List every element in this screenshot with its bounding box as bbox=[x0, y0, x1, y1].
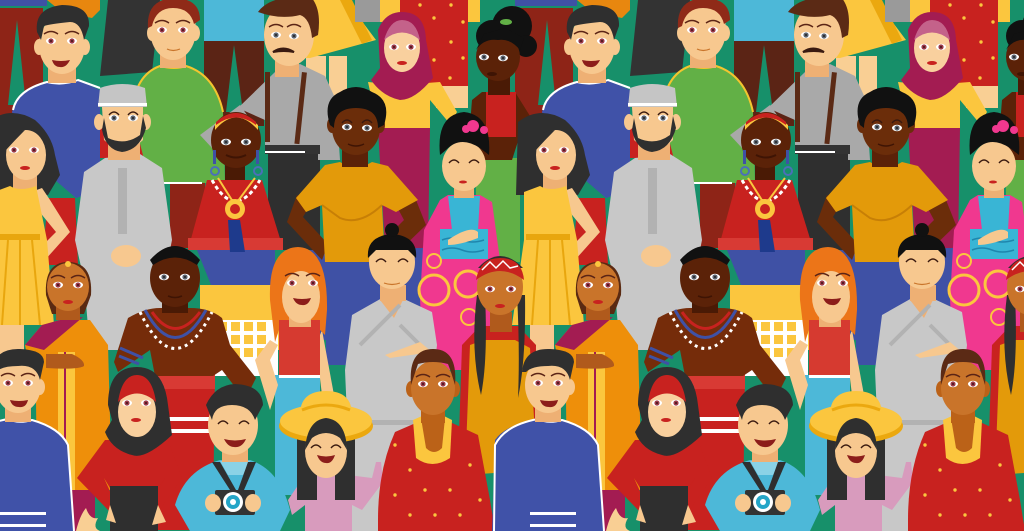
back row repeat right bbox=[542, 0, 1024, 262]
middle row of people bbox=[0, 84, 500, 370]
person: blue sweater man bbox=[12, 5, 100, 198]
back row of people bbox=[12, 0, 537, 262]
person: woman in yellow skirt (partly hidden) bbox=[302, 0, 387, 106]
person: blue sweater man, front bbox=[0, 349, 100, 531]
person: red-haired woman in light blue trousers bbox=[255, 247, 334, 495]
person: girl in pink kimono bbox=[419, 112, 500, 370]
person: man in red dotted dress bbox=[380, 0, 480, 108]
person: African woman with red cape and beads bbox=[188, 112, 283, 252]
person: woman in orange saree bbox=[25, 261, 112, 531]
person: man in grey wrap robe bbox=[345, 223, 437, 531]
person: green shirt man bbox=[132, 0, 225, 184]
person: mustached man with suspenders bbox=[200, 0, 340, 250]
person: Maasai man with beaded necklace bbox=[114, 246, 256, 530]
person: native woman with braids bbox=[458, 256, 537, 475]
person: smiling man with camera bbox=[175, 384, 290, 531]
person: woman in black hijab and red top bbox=[77, 367, 182, 531]
background tile repeat bbox=[515, 0, 1024, 531]
person: woman in maroon hijab bbox=[368, 12, 457, 248]
lower row repeat right bbox=[555, 223, 1024, 531]
person: afro man in orange shirt bbox=[287, 87, 426, 365]
person: girl in yellow hat and pink top bbox=[279, 391, 383, 531]
person: afro woman in red top bbox=[470, 6, 537, 262]
person: woman in yellow dress bbox=[0, 113, 70, 355]
person: man in red patterned shirt with gold collar bbox=[378, 349, 495, 531]
person: man in grey robe and cap bbox=[75, 84, 172, 350]
front row repeat right bbox=[492, 349, 1024, 531]
background tile: banners, trees and stalls bbox=[0, 0, 545, 531]
front row of people bbox=[0, 349, 495, 531]
middle row repeat right bbox=[512, 84, 1024, 370]
lower row of people bbox=[25, 223, 537, 531]
